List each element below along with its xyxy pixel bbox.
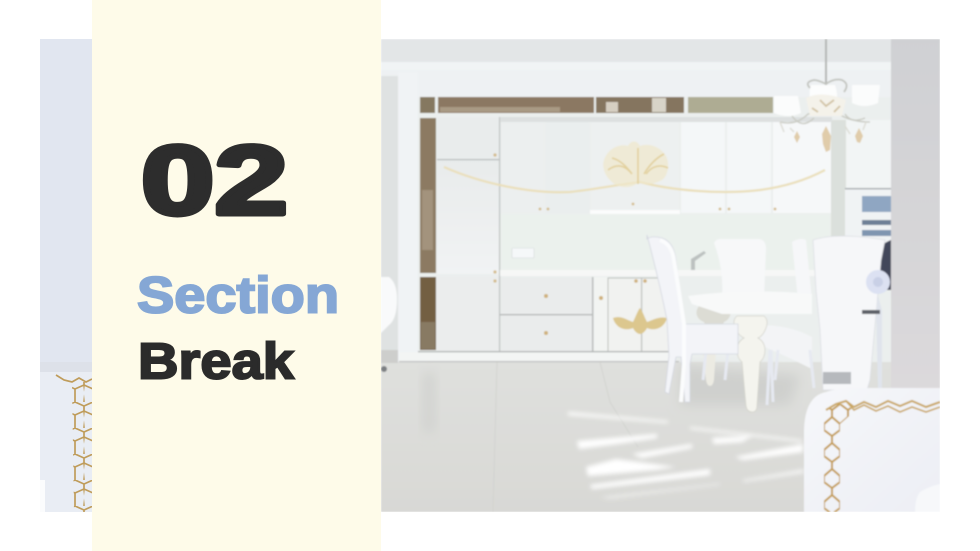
plinth bbox=[608, 352, 669, 358]
wall socket bbox=[513, 249, 533, 257]
heading: Section: Section bbox=[137, 266, 339, 324]
chandelier bbox=[774, 39, 880, 152]
heading: Break: Break bbox=[138, 332, 295, 390]
cream panel bbox=[92, 0, 381, 551]
photo: left strip with sofa bbox=[40, 39, 93, 512]
floor reflections bbox=[426, 366, 804, 498]
mirror strips bbox=[420, 97, 773, 350]
tall cabinet bbox=[437, 117, 500, 352]
left chair stub bbox=[381, 277, 397, 333]
side column bbox=[891, 39, 940, 389]
dining table and chairs bbox=[647, 235, 890, 412]
sofa bbox=[804, 388, 940, 512]
wall and ceiling bbox=[381, 39, 891, 369]
lower cabinets bbox=[500, 270, 814, 352]
counter backsplash bbox=[500, 214, 831, 272]
section number: 02: 02 bbox=[141, 125, 288, 235]
upper cabinets bbox=[444, 117, 832, 214]
photo: kitchen interior bbox=[381, 39, 940, 512]
floor bbox=[381, 362, 891, 512]
wall faucet bbox=[691, 251, 706, 270]
appliances: oven bbox=[845, 188, 891, 290]
